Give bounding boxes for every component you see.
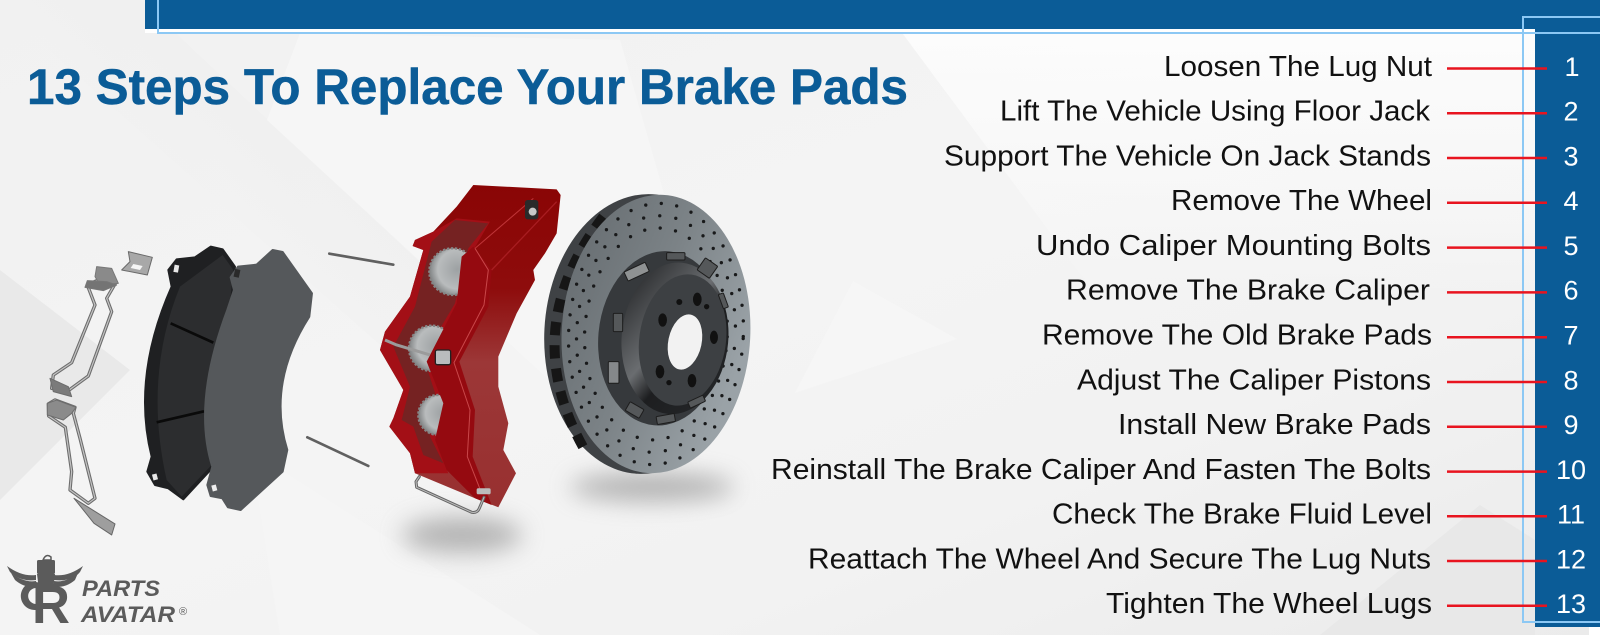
right numbers panel — [1535, 29, 1600, 627]
step 5: 5 — [1563, 231, 1579, 261]
step 8: Adjust The Caliper Pistons — [1077, 364, 1431, 396]
step 7: 7 — [1563, 320, 1579, 350]
step 11: Check The Brake Fluid Level — [1052, 499, 1432, 531]
step 5: Undo Caliper Mounting Bolts — [1036, 230, 1431, 262]
step 6 — [1066, 275, 1579, 307]
rotor: centre bore — [663, 311, 707, 373]
step 12: 12 — [1556, 544, 1586, 574]
caliper: front ridge — [427, 247, 492, 505]
logo: wordmark: PARTS — [82, 576, 160, 601]
rotor: vents — [555, 217, 603, 453]
piston: middle — [409, 326, 454, 371]
logo: Parts Avatar: ® — [179, 606, 187, 618]
icon: anti-rattle spring clip — [47, 252, 152, 535]
step 4: 4 — [1563, 186, 1579, 216]
rotor: mounting brackets — [608, 253, 728, 425]
step 2: Lift The Vehicle Using Floor Jack — [1000, 96, 1431, 128]
step 9 — [1118, 409, 1579, 441]
step 4 — [1171, 185, 1579, 217]
step 9: Install New Brake Pads — [1118, 409, 1431, 441]
shadow: under caliper — [402, 517, 522, 553]
step 11: 11 — [1557, 500, 1585, 530]
title: 13 Steps To Replace Your Brake Pads — [27, 59, 908, 115]
rotor: drilled holes — [562, 199, 750, 469]
rotor: hub bell — [615, 258, 735, 419]
icon: front brake pad backing plate — [205, 250, 312, 510]
icon: upper retaining pin — [329, 254, 393, 265]
step 10: Reinstall The Brake Caliper And Fasten The Bolts — [771, 454, 1431, 486]
step 6: 6 — [1563, 276, 1579, 306]
logo: Parts Avatar: AVATAR — [80, 602, 175, 627]
rotor: hub face — [631, 269, 735, 411]
rotor: lug holes — [656, 293, 718, 387]
step 3: Support The Vehicle On Jack Stands — [944, 140, 1431, 172]
step 8: 8 — [1563, 365, 1579, 395]
step 13: 13 — [1556, 589, 1586, 619]
caliper: square window — [435, 350, 451, 365]
icon: back brake pad with friction material — [145, 247, 235, 499]
piston: top — [429, 248, 476, 295]
step 13 — [1106, 588, 1586, 620]
caliper: top bolt — [525, 200, 538, 219]
step 8 — [1077, 364, 1579, 396]
icon: red brake caliper — [380, 185, 561, 512]
logo: mascot mark — [7, 556, 83, 635]
step 9: 9 — [1563, 410, 1579, 440]
icon: lower retaining pin — [307, 437, 368, 466]
step 12: Reattach The Wheel And Secure The Lug Nuts — [808, 543, 1431, 575]
rotor: friction face — [554, 190, 757, 478]
caliper: recess — [393, 220, 488, 463]
caliper: retaining wire — [416, 477, 484, 512]
top header bar — [145, 0, 1600, 33]
logo: Parts Avatar — [7, 556, 187, 635]
logo: mascot mark: R — [32, 575, 70, 635]
rotor: hub flange — [591, 246, 732, 431]
step 6: Remove The Brake Caliper — [1066, 275, 1430, 307]
steps list — [771, 51, 1586, 620]
rotor: outer rim — [537, 189, 753, 479]
shadow: under rotor — [570, 473, 734, 501]
step 10: 10 — [1556, 455, 1586, 485]
caliper: cross pin — [385, 340, 430, 355]
caliper: body silhouette — [380, 185, 561, 507]
piston: bottom — [418, 395, 458, 435]
step 1 — [1164, 51, 1580, 83]
icon: drilled brake rotor — [537, 189, 757, 479]
step 7: Remove The Old Brake Pads — [1042, 320, 1432, 352]
step 3: 3 — [1563, 141, 1579, 171]
caliper: bottom bolt — [477, 488, 491, 494]
step 2: 2 — [1563, 97, 1579, 127]
caliper: inner frame — [380, 218, 490, 473]
step 5 — [1036, 230, 1579, 262]
step 11 — [1052, 499, 1585, 531]
step 13: Tighten The Wheel Lugs — [1106, 588, 1432, 620]
step 1: Loosen The Lug Nut — [1164, 51, 1432, 83]
step 1: 1 — [1564, 52, 1580, 82]
step 4: Remove The Wheel — [1171, 185, 1432, 217]
